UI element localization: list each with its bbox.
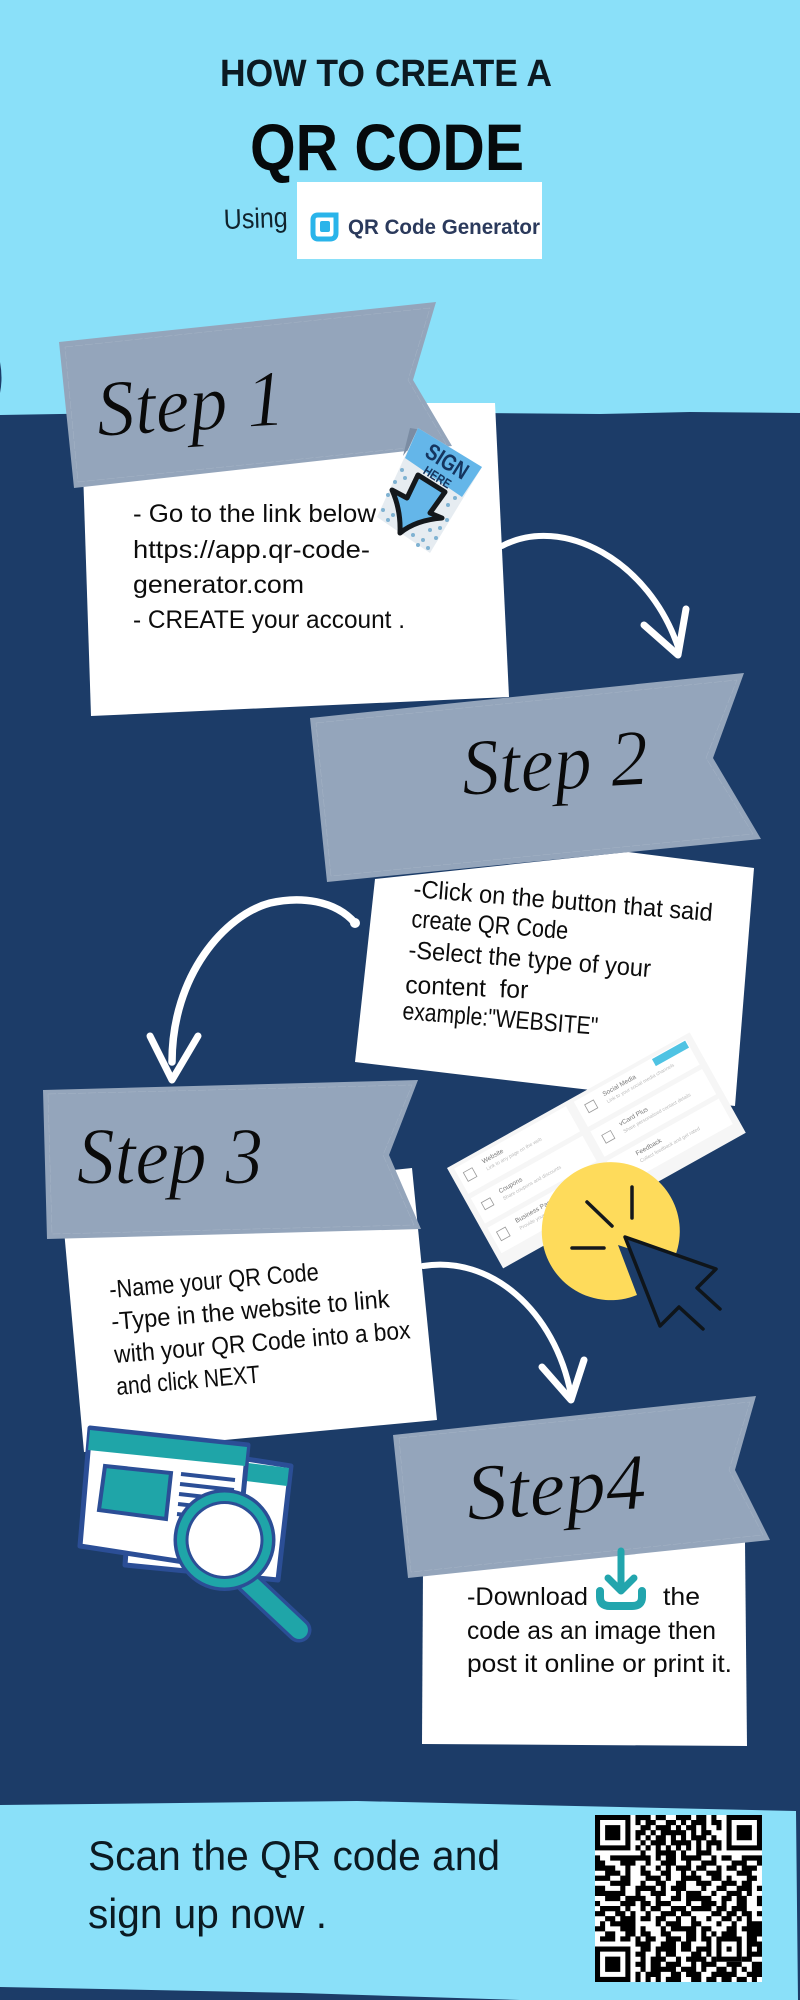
arrow: step 2 to step 3 <box>150 900 360 1080</box>
step 2 text: example:"WEBSITE" <box>402 997 599 1041</box>
step 1 text: generator.com <box>133 571 304 599</box>
step 1 text: - CREATE your account . <box>133 606 405 634</box>
step 4 ribbon <box>393 1396 770 1578</box>
panel: step 3 <box>43 1080 437 1630</box>
icon: logo mark <box>313 215 336 239</box>
icon: download <box>600 1551 642 1606</box>
step 3 text <box>108 1258 412 1401</box>
screenshot: content type menu: Coupons <box>498 1176 524 1195</box>
panel: step 1 <box>59 302 509 716</box>
screenshot: content type menu: Share personalised contact details <box>623 1092 693 1135</box>
step 1 text <box>133 500 405 634</box>
step 2 text: content for <box>405 971 529 1004</box>
step 3 text: and click NEXT <box>115 1361 261 1401</box>
step 1 heading: Step 1 <box>94 355 287 454</box>
screenshot: content type menu: Social Media <box>602 1074 638 1098</box>
step 3 text: with your QR Code into a box <box>112 1316 412 1369</box>
logo text: QR Code Generator <box>348 216 540 239</box>
step 2 card <box>355 852 754 1106</box>
step 1 ribbon <box>59 302 452 488</box>
arrow: step 3 to step 4 <box>423 1265 584 1400</box>
bottom call-to-action band <box>0 1801 798 2000</box>
step 2 text: create QR Code <box>411 905 569 945</box>
logo: QR Code Generator <box>297 182 542 259</box>
call-to-action text: Scan the QR code and <box>88 1832 500 1879</box>
step 2 ribbon <box>310 673 761 882</box>
call-to-action text: sign up now . <box>88 1890 327 1937</box>
heading line two: QR CODE <box>250 110 524 184</box>
icon: sign here sticker <box>377 428 482 553</box>
call-to-action text <box>88 1832 500 1937</box>
panel: step 2 <box>310 673 761 1329</box>
step 4 heading: Step4 <box>463 1438 649 1538</box>
step 3 text: -Type in the website to link <box>110 1285 391 1336</box>
step 3 ribbon <box>43 1080 421 1239</box>
screenshot: content type menu: Website <box>481 1148 505 1165</box>
QR code <box>595 1815 762 1982</box>
top light blue background <box>0 0 800 415</box>
step 2 text: -Select the type of your <box>408 936 652 983</box>
step 2 text <box>402 875 714 1041</box>
screenshot: content type menu: Provide your business details <box>519 1195 579 1232</box>
step 3 heading: Step 3 <box>77 1113 263 1201</box>
screenshot: content type menu: Link to any page on the web <box>485 1137 543 1172</box>
step 2 text: -Click on the button that said <box>413 875 714 927</box>
panel: step 4 <box>393 1396 770 1746</box>
screenshot: content type menu: Collect feedback and get rated <box>639 1126 701 1164</box>
step 4 text: -Download <box>467 1583 588 1611</box>
step 1 card <box>83 403 509 716</box>
heading line one: HOW TO CREATE A <box>220 53 552 95</box>
step 4 card <box>422 1542 747 1746</box>
screenshot: content type menu: Link to your social media channels <box>606 1062 676 1105</box>
screenshot: content type menu <box>447 1032 746 1268</box>
icon: sign here sticker: HERE <box>421 463 454 492</box>
icon: click cursor on yellow circle <box>542 1162 720 1329</box>
step 1 text: - Go to the link below <box>133 500 377 528</box>
arrow: step 1 to step 2 <box>502 536 686 655</box>
step 3 card <box>64 1168 437 1452</box>
step 4 text: the <box>663 1583 700 1611</box>
step 4 text: code as an image then <box>467 1617 716 1645</box>
screenshot: content type menu: Share coupons and discounts <box>502 1164 563 1202</box>
step 3 text: -Name your QR Code <box>108 1258 320 1304</box>
screenshot: content type menu: Business Page <box>514 1197 556 1225</box>
using label: Using <box>223 202 288 235</box>
screenshot: content type menu: Feedback <box>635 1137 664 1157</box>
screenshot: content type menu: vCard Plus <box>618 1106 650 1128</box>
icon: sign here sticker: SIGN <box>421 438 474 484</box>
step 4 text: post it online or print it. <box>467 1650 732 1678</box>
step 2 heading: Step 2 <box>459 714 651 813</box>
icon: browser windows with magnifier <box>80 1428 299 1630</box>
title <box>220 53 552 184</box>
step 1 text: https://app.qr-code- <box>133 536 370 564</box>
step 4 text <box>467 1583 732 1678</box>
